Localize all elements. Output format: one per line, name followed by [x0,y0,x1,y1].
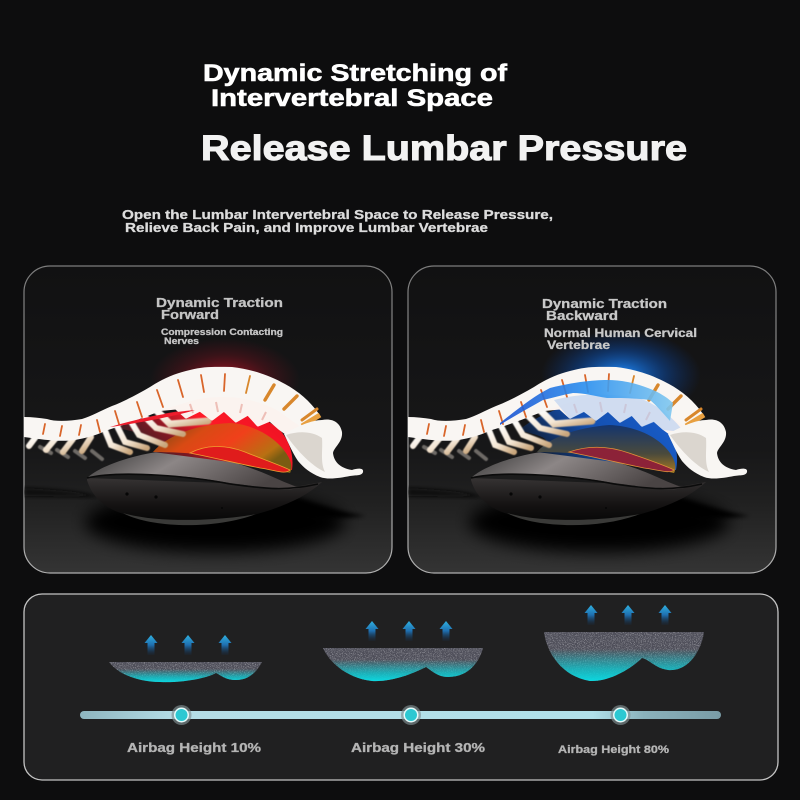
panel text: Backward [546,308,618,323]
panel text: Compression Contacting [161,327,283,337]
slider knob 30% [401,705,421,725]
icon: airbag 30% [323,648,483,681]
panel illustration: spine on lumbar device with red compression [24,338,366,552]
title [203,60,508,112]
panel illustration: spine on lumbar device with blue decompression [408,330,750,552]
airbag 30% with arrows [323,621,483,681]
subtitle text block: Relieve Back Pain, and Improve Lumbar Vertebrae [125,220,488,235]
label: airbag height 10%: Airbag Height 10% [127,740,262,755]
panel text [542,296,697,352]
slider knob 10% [172,705,192,725]
label: airbag height 30%: Airbag Height 30% [351,740,486,755]
panel text: Nerves [164,336,199,346]
title: Dynamic Stretching of [203,60,508,87]
icon: airbag 10% [109,662,262,682]
subtitle text block [122,207,553,235]
panel text: Dynamic Traction [156,295,283,310]
airbag 80% with arrows [544,605,704,681]
icon: up arrows 10% [144,635,232,655]
panel background [24,594,778,780]
panel background [24,266,392,573]
icon: airbag 80% [544,632,704,681]
title: Intervertebral Space [211,85,493,112]
panel: airbag height stages [24,594,778,780]
panel text: Dynamic Traction [542,296,667,311]
slider track [80,711,721,719]
airbag 10% with arrows [109,635,262,682]
panel background [408,266,776,573]
slider knob 80% [610,705,630,725]
panel: dynamic traction forward [24,266,392,573]
heading: Release Lumbar Pressure [201,129,687,168]
panel text [156,295,283,346]
label: airbag height 80%: Airbag Height 80% [558,744,669,756]
icon: up arrows 80% [584,605,672,625]
panel: dynamic traction backward [408,266,776,573]
icon: up arrows 30% [366,621,452,641]
panel text: Forward [161,307,219,322]
subtitle text block: Open the Lumbar Intervertebral Space to Release Pressure, [122,207,553,222]
panel text: Normal Human Cervical [544,326,697,340]
panel text: Vertebrae [547,338,610,352]
